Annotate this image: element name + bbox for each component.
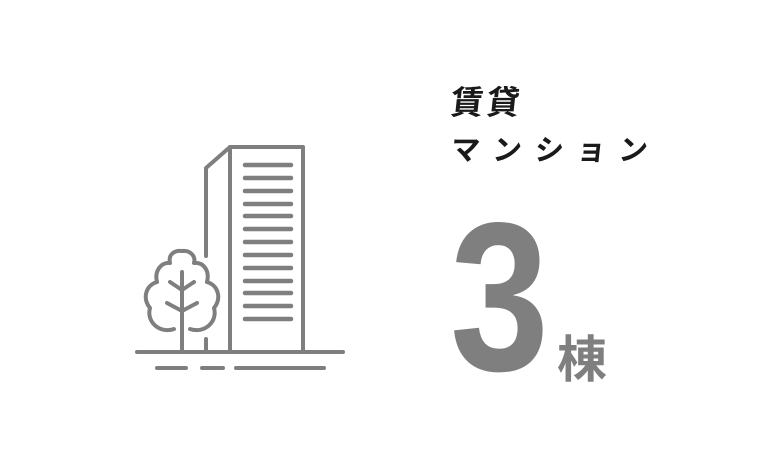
- building: [206, 147, 303, 352]
- ground: [137, 352, 343, 368]
- tree: [146, 251, 218, 352]
- heading: マンション: マンション: [449, 135, 662, 167]
- unit: 棟: 棟: [557, 332, 607, 388]
- number: 3: 3: [450, 178, 549, 415]
- heading: 賃貸: 賃貸: [449, 84, 525, 121]
